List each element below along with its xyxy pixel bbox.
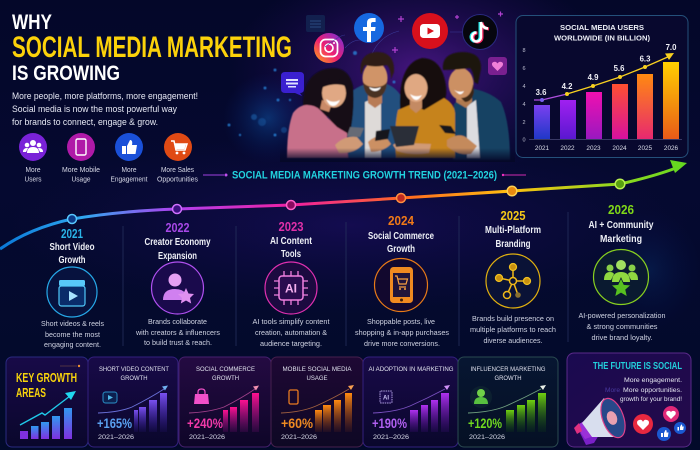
- period: 2021–2026: [469, 434, 505, 441]
- node: [507, 186, 517, 196]
- y axis labels: 2: [522, 120, 526, 126]
- card title: [99, 366, 169, 382]
- card title: [196, 366, 256, 382]
- card title: [282, 366, 352, 382]
- person: woman in mustard: [395, 58, 455, 158]
- person: man in denim: [347, 52, 403, 158]
- year labels: 2022: [560, 145, 575, 152]
- description: [578, 311, 666, 342]
- icon: community star: [594, 250, 648, 304]
- heading: [50, 226, 94, 266]
- icon: reaction bubbles: [633, 406, 686, 441]
- trend arrow: [373, 385, 450, 413]
- mini bars: [410, 393, 449, 432]
- chart title: WORLDWIDE (IN BILLION): [554, 34, 651, 42]
- heading: 2026: [608, 202, 634, 217]
- description: become the most: [45, 330, 100, 339]
- y axis labels: 4: [522, 102, 526, 108]
- social icons: [281, 12, 507, 96]
- timeline curve with arrow: [0, 160, 687, 249]
- node: [172, 204, 182, 214]
- icon: chat bubble: [281, 72, 304, 96]
- description: [470, 314, 556, 345]
- trend line with arrow: [534, 53, 674, 102]
- icon: influencer: [470, 386, 492, 408]
- period: 2021–2026: [98, 434, 134, 441]
- icon: megaphone: [574, 395, 630, 445]
- card title: INFLUENCER MARKETING: [470, 366, 546, 373]
- value: +165%: [97, 415, 132, 431]
- description: with creators & influencers: [135, 328, 220, 337]
- year labels: 2021: [535, 145, 550, 152]
- heading: AREAS: [16, 386, 46, 400]
- heading: Branding: [496, 239, 530, 250]
- panel: mobile social media usage: [271, 357, 363, 447]
- description: [355, 317, 449, 348]
- icon: AI chip: [265, 262, 317, 314]
- value: +240%: [187, 415, 223, 431]
- card title: MOBILE SOCIAL MEDIA: [282, 366, 352, 373]
- icon: youtube: [412, 13, 448, 49]
- card title: GROWTH: [212, 375, 239, 382]
- icon: network hub: [486, 254, 540, 308]
- icon: more sales opportunities: More Sales: [161, 167, 194, 174]
- description: shopping & in-app purchases: [355, 328, 449, 337]
- panel: social commerce growth: [179, 357, 271, 447]
- description: multiple platforms to reach: [470, 325, 556, 334]
- icon: more users: [19, 133, 47, 184]
- heading: Growth: [387, 244, 415, 255]
- person: woman in pink: [287, 68, 354, 158]
- y axis labels: [522, 48, 526, 144]
- description: Short videos & reels: [41, 319, 104, 328]
- heading: AI + Community: [588, 220, 654, 231]
- heading: [368, 213, 434, 255]
- card title: [470, 366, 546, 382]
- intro text: Social media is now the most powerful way: [12, 104, 177, 114]
- value labels: [536, 43, 677, 97]
- intro text: for brands to connect, engage & grow.: [12, 117, 158, 127]
- heading: Tools: [281, 249, 301, 260]
- value: +120%: [468, 415, 502, 431]
- devices and hands: [335, 125, 477, 154]
- description: Brands collaborate: [148, 317, 207, 326]
- heading: 2023: [278, 219, 304, 234]
- icon: AI chip: AI: [285, 282, 297, 296]
- card title: GROWTH: [494, 375, 522, 382]
- description: diverse audiences.: [484, 336, 542, 345]
- icon: video clapper: [47, 267, 97, 317]
- year labels: 2025: [638, 145, 653, 152]
- bars: [534, 62, 679, 139]
- period: 2021–2026: [189, 434, 225, 441]
- icon: heart bubble: [488, 57, 507, 75]
- icon: more mobile usage: Usage: [72, 176, 91, 184]
- benefit icons row: [19, 133, 198, 184]
- description: audience targeting.: [260, 339, 322, 348]
- intro text: More people, more platforms, more engagement!: [12, 91, 198, 101]
- description: drive brand loyalty.: [592, 333, 652, 342]
- value labels: 5.6: [614, 64, 625, 73]
- milestone 2022: [135, 204, 220, 347]
- icon: more users: Users: [24, 176, 42, 184]
- description: creation, automation &: [255, 328, 327, 337]
- value labels: 4.2: [562, 82, 573, 91]
- heading: 2022: [166, 220, 190, 235]
- panel: key growth areas: [6, 357, 88, 447]
- chart panel: social media users worldwide: [516, 16, 688, 158]
- body text: More engagement.: [624, 377, 682, 384]
- year labels: 2024: [612, 145, 627, 152]
- icon: more mobile usage: [62, 133, 100, 184]
- bars: [20, 408, 72, 439]
- section heading: growth trend: SOCIAL MEDIA MARKETING GROWTH TREND (2021–2026): [232, 170, 497, 182]
- heading: [485, 208, 541, 250]
- description: engaging content.: [44, 340, 101, 349]
- trend arrow: [281, 385, 354, 413]
- description: AI-powered personalization: [578, 311, 666, 320]
- value labels: 4.9: [588, 73, 599, 82]
- milestone 2024: [355, 194, 449, 348]
- chart title: [554, 23, 651, 42]
- panel: influencer marketing growth: [458, 357, 558, 447]
- icon: tiktok: [462, 14, 498, 50]
- title: SOCIAL MEDIA MARKETING: [12, 31, 292, 64]
- heading: Marketing: [600, 234, 642, 245]
- heading: AI Content: [270, 236, 313, 247]
- intro text: [12, 91, 198, 127]
- milestone 2021: [41, 214, 104, 349]
- heading: 2024: [388, 213, 415, 228]
- description: Shoppable posts, live: [367, 317, 435, 326]
- mini bars: [134, 393, 167, 432]
- y axis labels: 0: [522, 138, 526, 144]
- description: & strong communities: [586, 322, 658, 331]
- title: [12, 11, 292, 85]
- title: WHY: [12, 11, 52, 34]
- heading: [270, 219, 313, 260]
- year labels: 2023: [586, 145, 601, 152]
- y axis labels: 6: [522, 66, 526, 72]
- icon: shopping bag: [194, 389, 209, 404]
- trend arrow: [189, 386, 259, 413]
- milestone 2023: [252, 200, 330, 348]
- heading: [144, 220, 211, 262]
- person: man in teal shirt: [443, 52, 510, 160]
- milestone 2026: [578, 179, 666, 342]
- icon: instagram: [314, 33, 344, 63]
- icon: shopping phone: [374, 258, 428, 312]
- heading: Creator Economy: [144, 237, 211, 248]
- value labels: 3.6: [536, 88, 547, 97]
- icon: more sales opportunities: [157, 133, 198, 184]
- heading: [16, 371, 77, 400]
- description: drive more conversions.: [364, 339, 440, 348]
- heading: 2025: [500, 208, 526, 223]
- mini bars: [223, 393, 259, 432]
- value: +60%: [281, 415, 313, 431]
- year labels: 2026: [664, 145, 679, 152]
- period: 2021–2026: [373, 434, 409, 441]
- icon: more engagement: Engagement: [110, 176, 148, 184]
- description: to build trust & reach.: [144, 338, 212, 347]
- icon: facebook: [354, 13, 384, 43]
- description: [41, 319, 104, 349]
- milestone 2025: [470, 186, 556, 345]
- icon: faint message square: [306, 15, 325, 32]
- heading: Short Video: [50, 242, 94, 253]
- trend arrow: [468, 385, 546, 413]
- node: [68, 214, 76, 224]
- icon: more sales opportunities: Opportunities: [157, 176, 198, 184]
- panel: AI adoption in marketing: [363, 357, 458, 447]
- heading: Multi-Platform: [485, 225, 541, 236]
- value labels: 7.0: [666, 43, 677, 52]
- y axis labels: 4: [522, 84, 526, 90]
- icon: creator star: [152, 262, 204, 314]
- icon: phone: [289, 390, 298, 404]
- card title: GROWTH: [120, 375, 148, 382]
- chart title: SOCIAL MEDIA USERS: [560, 23, 644, 32]
- body text: More opportunities.: [623, 387, 682, 394]
- icon: play: [103, 392, 117, 403]
- heading: Social Commerce: [368, 231, 434, 242]
- body text: [605, 377, 682, 403]
- icon: more engagement: More: [122, 167, 137, 174]
- node: [615, 179, 625, 189]
- heading: [588, 202, 654, 245]
- icon: more engagement: [110, 133, 148, 184]
- card title: SOCIAL COMMERCE: [196, 366, 256, 373]
- year labels: [535, 145, 679, 152]
- photo: four people with devices: [287, 52, 510, 160]
- network glow decoration: [228, 51, 396, 136]
- card title: AI ADOPTION IN MARKETING: [368, 366, 454, 373]
- node: [286, 200, 296, 210]
- panel: short video content growth: [88, 357, 178, 447]
- card title: USAGE: [306, 375, 328, 382]
- heading: KEY GROWTH: [16, 371, 77, 385]
- period: 2021–2026: [281, 434, 317, 441]
- body text: growth for your brand!: [620, 396, 682, 403]
- body text: More: [605, 387, 620, 394]
- card title: SHORT VIDEO CONTENT: [99, 366, 169, 373]
- icon: more users: More: [26, 167, 41, 174]
- heading: Expansion: [158, 251, 197, 262]
- node: [396, 194, 406, 202]
- trend arrow: [98, 386, 168, 413]
- icon: AI chip: AI: [383, 396, 389, 402]
- description: AI tools simplify content: [252, 317, 330, 326]
- icon: more mobile usage: More Mobile: [62, 167, 100, 174]
- description: [135, 317, 220, 347]
- value: +190%: [372, 415, 407, 431]
- description: [252, 317, 330, 348]
- mini bars: [506, 393, 546, 432]
- mini bars: [315, 393, 352, 432]
- value labels: 6.3: [640, 54, 651, 64]
- heading: Growth: [58, 255, 86, 266]
- description: Brands build presence on: [472, 314, 554, 323]
- arrow: [20, 391, 76, 425]
- title: IS GROWING: [12, 62, 120, 85]
- panel: the future is social: [567, 353, 691, 447]
- column dividers: [123, 212, 568, 346]
- y axis labels: 8: [522, 48, 526, 54]
- heading: 2021: [61, 226, 83, 241]
